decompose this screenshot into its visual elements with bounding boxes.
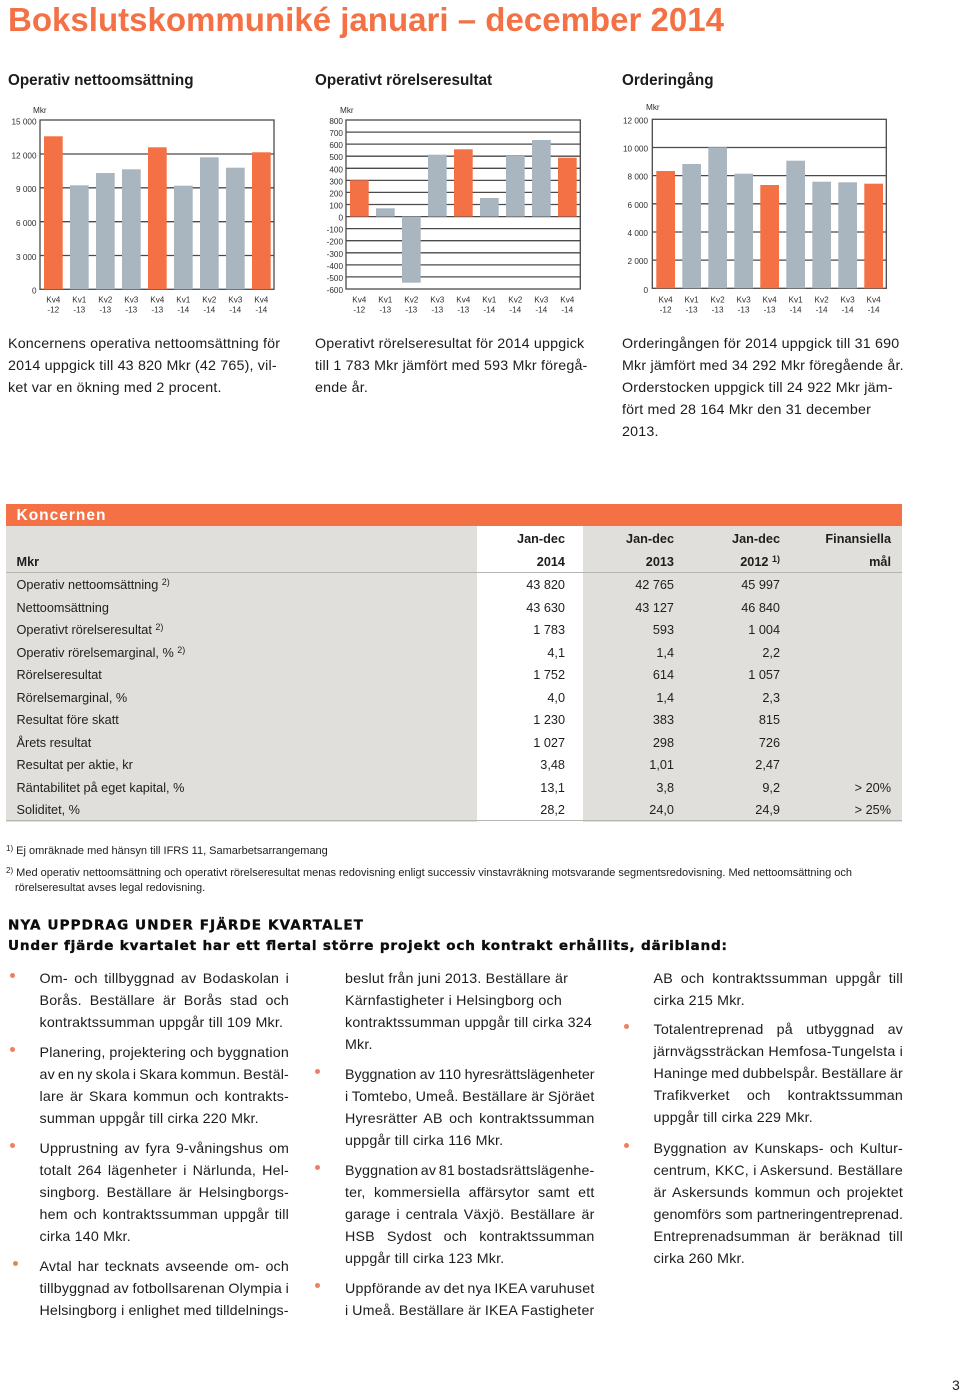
text block: nettoomsättning: Koncernens operativa nettoomsättning för [8,336,280,352]
footnote 2: 2) Med operativ nettoomsättning och operativt rörelseresultat menas redovisning enligt successiv vinstavräkning motsvarande segmentsredovisning. Med nettoomsättning och [6,866,852,879]
bullet item: Olympia: tillbyggnad av fotbollsarenan Olympia i [40,1281,289,1297]
row: operativ rörelsemarginal: 1,4 [656,646,674,660]
row: nettoomsättning: 43 630 [526,601,565,615]
row: räntabilitet: > 20% [855,781,891,795]
bar chart: operativ nettoomsättning: Kv1 [176,296,191,304]
row: resultat före skatt: 815 [759,713,780,727]
bullet item: Närlunda: Upprustning av fyra 9-våningshus om [40,1141,289,1157]
header row 2: 2012 1) [740,554,780,569]
bar chart: operativt rörelseresultat [327,106,581,314]
bar chart: operativ nettoomsättning: Kv4 [150,296,165,304]
bullet item: Växjö: Byggnation av 81 bostadsrättslägenhe- [345,1163,594,1179]
bar chart: operativ nettoomsättning: Kv3 [228,296,243,304]
bar chart: orderingång: 8 000 [628,173,648,182]
bar chart: operativt rörelseresultat: 100 [329,202,343,210]
bar chart: operativ nettoomsättning: -13 [151,306,164,314]
row: resultat före skatt: Resultat före skatt [16,713,119,727]
bar chart: operativt rörelseresultat: Kv2 [404,296,419,304]
row: resultat före skatt: 383 [653,713,674,727]
row: räntabilitet: 13,1 [540,781,565,795]
heading: Nya uppdrag: Under fjärde kvartalet har ett flertal större projekt och kontrakt erhållits, däribland: [8,937,727,954]
row: resultat per aktie [16,758,780,772]
row: soliditet: 28,2 [540,803,565,817]
bar chart: operativ nettoomsättning: Kv2 [98,296,113,304]
bullet item: Askersund: cirka 260 Mkr. [654,1251,745,1267]
text block: rörelseresultat: ende år. [315,380,368,396]
bar chart: operativt rörelseresultat: 700 [329,129,343,138]
bar chart: operativ nettoomsättning: Kv1 [72,296,87,304]
bullet item: Bodaskolan [10,971,289,1031]
bullet item: Växjö [315,1163,594,1267]
footnote 2 [6,866,852,894]
bar chart: operativt rörelseresultat: Kv1 [482,296,497,304]
row: soliditet: 24,0 [649,803,674,817]
bar chart: orderingång: Kv1 [789,296,803,304]
bar chart: operativt rörelseresultat: Kv4 [352,296,367,304]
bar chart: operativ nettoomsättning: -12 [47,306,60,314]
row: resultat per aktie: 2,47 [755,758,780,772]
bar chart: operativt rörelseresultat: Kv2 [508,296,523,304]
bar chart: orderingång: Kv4 [659,296,673,304]
row: operativt rörelseresultat [16,622,780,637]
row: operativ nettoomsättning: 42 765 [635,578,674,592]
footnote 2: rörelseresultat avses legal redovisning. [15,882,205,894]
bar chart: orderingång: 10 000 [623,144,648,154]
row: operativ nettoomsättning [16,577,780,592]
header row 1: Jan-dec [732,532,780,546]
text continuation: IKEA column top [345,971,592,1053]
bar chart: operativt rörelseresultat: -600 [327,286,343,295]
text block: orderingång: Orderingången för 2014 uppgick till 31 690 [622,336,899,352]
bar chart: orderingång: -14 [842,306,854,314]
row: operativ nettoomsättning: 45 997 [741,578,780,592]
row: räntabilitet [16,781,891,795]
bar chart: operativ nettoomsättning: -13 [73,306,86,314]
bar chart: operativ nettoomsättning: 12 000 [11,152,37,160]
row: operativ nettoomsättning: 43 820 [526,578,565,592]
bullet item: Olympia: Avtal har tecknats avseende om- och [40,1259,289,1275]
bar chart: operativt rörelseresultat: -200 [327,238,343,247]
bar chart: operativt rörelseresultat: -14 [483,306,496,314]
text block: orderingång: 2013. [622,424,659,440]
bar chart: operativt rörelseresultat: -500 [327,274,343,283]
row: räntabilitet: Räntabilitet på eget kapital, % [16,781,184,795]
row: nettoomsättning: 46 840 [741,601,780,615]
row: rörelseresultat: 614 [653,668,674,682]
bar chart: operativt rörelseresultat: -13 [405,306,418,314]
bar chart: operativt rörelseresultat: -13 [431,306,444,314]
row: årets resultat: 1 027 [533,736,565,750]
bullet item: Tombebo: Byggnation av 110 hyresrättslägenheter [345,1067,594,1083]
bar chart: operativ nettoomsättning: -13 [99,306,112,314]
row: operativt rörelseresultat: 1 004 [748,623,780,637]
bar chart: orderingång: 2 000 [628,257,648,266]
bar chart: operativ nettoomsättning: -14 [177,306,190,314]
bar chart: orderingång: -13 [764,306,776,314]
bullet item: Närlunda: cirka 140 Mkr. [40,1229,131,1245]
bar chart: operativt rörelseresultat: Kv1 [378,296,393,304]
header row 1: Finansiella [825,532,891,546]
bar chart: operativ nettoomsättning: Kv3 [124,296,139,304]
bar chart: operativt rörelseresultat: -13 [457,306,470,314]
row: operativt rörelseresultat: 1 783 [533,623,565,637]
bullet item: Tombebo [315,1067,594,1149]
bar chart: orderingång: Kv3 [841,296,855,304]
bar chart: operativ nettoomsättning: Kv2 [202,296,217,304]
bullet item: Bodaskolan: Om- och tillbyggnad av Bodaskolan i [40,971,289,987]
header row 2: 2014 [537,555,565,569]
bullet item: Skara: Planering, projektering och byggnation [40,1045,289,1061]
row: soliditet: > 25% [855,803,891,817]
bullet item: Tombebo: Hyresrätter AB och kontraktssumman [345,1111,594,1127]
bar chart: operativ nettoomsättning: Mkr [33,106,47,115]
row: rörelseresultat [16,668,780,682]
row: operativ rörelsemarginal: 2,2 [762,646,780,660]
bullet item: Askersund: är Askersunds kommun och projektet [654,1185,903,1201]
bar chart: operativ nettoomsättning: 15 000 [11,118,37,126]
bullet item: Närlunda: hem och kontraktssumman uppgår till [40,1207,289,1223]
table header bar [6,504,902,526]
row: räntabilitet: 9,2 [762,781,780,795]
bullet item: Hemfosa-Tungelsta [624,1022,903,1126]
text block: nettoomsättning: ket var en ökning med 2 procent. [8,380,222,396]
text block: nettoomsättning: 2014 uppgick till 43 820 Mkr (42 765), vil- [8,358,277,374]
heading: Nya uppdrag: NYA UPPDRAG UNDER FJÄRDE KVARTALET [8,916,364,934]
bullet item: Skara [10,1045,289,1127]
bar chart: operativ nettoomsättning: 0 [32,286,37,296]
table: Koncernen [6,504,902,822]
row: rörelsemarginal: 2,3 [762,691,780,705]
text block: rörelseresultat: Operativt rörelseresultat för 2014 uppgick [315,336,584,352]
bar chart: orderingång: Kv4 [867,296,881,304]
bar chart: orderingång: 6 000 [628,201,648,210]
bullet item: Hemfosa-Tungelsta: järnvägssträckan Hemfosa-Tungelsta i [654,1044,903,1060]
text continuation: column three top: AB och kontraktssumman uppgår till [654,971,903,987]
bullet item: Bodaskolan: kontraktssumman uppgår till 109 Mkr. [40,1015,283,1031]
bullet item: Närlunda: singborg. Beställare är Helsingborgs- [40,1185,289,1201]
row: årets resultat: Årets resultat [16,736,91,750]
row: rörelseresultat: Rörelseresultat [16,668,102,682]
text continuation: column three top [654,971,903,1009]
bullet item: Skara: summan uppgår till cirka 220 Mkr. [40,1111,259,1127]
bullet item: Närlunda: totalt 264 lägenheter i Närlunda, Hel- [40,1163,289,1179]
bullet item: IKEA: Uppförande av det nya IKEA varuhuset [345,1281,594,1297]
bar chart: operativ nettoomsättning [11,106,275,314]
row: operativ nettoomsättning: Operativ nettoomsättning 2) [16,577,170,592]
bullet item: Hemfosa-Tungelsta: Haninge med dubbelspår. Beställare är [654,1066,903,1082]
bar chart: orderingång: Mkr [646,103,660,112]
bar chart: operativt rörelseresultat: -14 [535,306,548,314]
bar chart: orderingång: Kv1 [685,296,699,304]
bar chart: operativt rörelseresultat: 300 [329,177,343,186]
header row 2: mål [869,555,891,569]
bar chart: operativ nettoomsättning: 6 000 [16,219,37,228]
row: soliditet: 24,9 [755,803,780,817]
heading: Orderingång: Orderingång [622,72,714,89]
heading: Operativ nettoomsättning: Operativ nettoomsättning [8,72,194,89]
row: rörelsemarginal [16,691,780,705]
bullet item: Växjö: HSB Sydost och kontraktssumman [345,1229,594,1245]
bar chart: orderingång: 12 000 [623,116,648,126]
row: soliditet [16,803,891,817]
row: operativ rörelsemarginal: 4,1 [547,646,565,660]
bar chart: operativ nettoomsättning: -14 [255,306,268,314]
table header bar: Koncernen [16,507,106,524]
bar chart: operativt rörelseresultat: -12 [353,306,366,314]
bar chart: operativt rörelseresultat: -14 [561,306,574,314]
bullet item: Bodaskolan: Borås. Beställare är Borås stad och [40,993,289,1009]
text continuation: IKEA column top: kontraktssumman uppgår till cirka 324 [345,1015,592,1031]
bullet item: Olympia [13,1259,289,1319]
bar chart: orderingång: 4 000 [628,229,648,238]
bar chart: orderingång: -13 [738,306,750,314]
heading: Operativt rörelseresultat: Operativt rörelseresultat [315,72,492,89]
highlighted column 2014 [477,526,583,822]
text block: orderingång: fört med 28 164 Mkr den 31 december [622,402,871,418]
bullet item: IKEA [315,1281,594,1319]
row: soliditet: Soliditet, % [16,803,80,817]
bullet item: Närlunda [10,1141,289,1245]
bullet item: Tombebo: i Tomtebo, Umeå. Beställare är Sjöräet [345,1089,594,1105]
bar chart: orderingång: -14 [816,306,828,314]
bar chart: operativt rörelseresultat: Mkr [340,106,354,115]
row: nettoomsättning: 43 127 [635,601,674,615]
row: årets resultat: 726 [759,736,780,750]
header row 1 [517,532,892,546]
bullet item: Hemfosa-Tungelsta: Trafikverket och kontraktssumman [654,1088,903,1104]
bar chart: operativt rörelseresultat: 800 [329,117,343,126]
bar chart: operativt rörelseresultat: Kv3 [430,296,445,304]
bar chart: orderingång: -12 [660,306,672,314]
row: resultat före skatt [16,713,780,727]
text continuation: IKEA column top: Kärnfastigheter i Helsingborg och [345,993,562,1009]
header row 2: 2013 [646,555,674,569]
row: operativt rörelseresultat: Operativt rörelseresultat 2) [16,622,163,637]
text continuation: column three top: cirka 215 Mkr. [654,993,745,1009]
text block: nettoomsättning [8,336,280,396]
row: operativ rörelsemarginal [16,645,780,660]
bullet item: Hemfosa-Tungelsta: uppgår till cirka 229 Mkr. [654,1110,813,1126]
header row 1: Jan-dec [626,532,674,546]
row: rörelsemarginal: 1,4 [656,691,674,705]
text block: orderingång: Orderstocken uppgick till 24 922 Mkr jäm- [622,380,893,396]
bar chart: operativ nettoomsättning: Kv4 [46,296,61,304]
bullet item: Skara: lare är Skara kommun och kontrakts- [40,1089,289,1105]
bar chart: orderingång: -13 [712,306,724,314]
bar chart: orderingång: Kv3 [737,296,751,304]
bar chart: operativt rörelseresultat: -13 [379,306,392,314]
bullet item: Tombebo: uppgår till cirka 116 Mkr. [345,1133,503,1149]
bar chart: operativ nettoomsättning: 9 000 [16,185,37,194]
row: rörelsemarginal: Rörelsemarginal, % [16,691,127,705]
bullet item: Växjö: uppgår till cirka 123 Mkr. [345,1251,504,1267]
bar chart: operativt rörelseresultat: 500 [329,153,343,162]
bar chart: orderingång: Kv2 [711,296,725,304]
row: rörelseresultat: 1 057 [748,668,780,682]
bar chart: operativ nettoomsättning: 3 000 [16,253,37,262]
header row 1: Jan-dec [517,532,565,546]
bullet item: Olympia: Helsingborg i enlighet med tilldelnings- [40,1303,289,1319]
bar chart: operativt rörelseresultat: Kv4 [560,296,575,304]
bar chart: orderingång: Kv4 [763,296,777,304]
bar chart: operativt rörelseresultat: 400 [329,165,343,174]
text continuation: IKEA column top: Mkr. [345,1037,373,1053]
row: operativt rörelseresultat: 593 [653,623,674,637]
bullet item: Skara: av en ny skola i Skara kommun. Bestäl- [40,1067,289,1083]
bullet item: Askersund [624,1141,903,1267]
bullet item: Växjö: ter, kommersiella affärsytor samt ett [345,1185,594,1201]
bar chart: operativt rörelseresultat: 200 [329,189,343,198]
page number: 3 [952,1377,960,1393]
bullet item: Askersund: Byggnation av Kunskaps- och Kultur- [654,1141,903,1157]
row: resultat per aktie: 1,01 [649,758,674,772]
bar chart: operativt rörelseresultat: -300 [327,250,343,259]
row: resultat före skatt: 1 230 [533,713,565,727]
bar chart: orderingång: -13 [686,306,698,314]
bullet item: Askersund: genomförs som partneringentreprenad. [654,1207,903,1223]
bullet item: Hemfosa-Tungelsta: Totalentreprenad på utbyggnad av [654,1022,903,1038]
bar chart: operativ nettoomsättning: -14 [229,306,242,314]
bar chart: operativt rörelseresultat: 0 [338,214,343,223]
text continuation: IKEA column top: beslut från juni 2013. Beställare är [345,971,568,987]
bar chart: operativt rörelseresultat: -400 [327,262,343,271]
bar chart: orderingång [623,103,887,314]
title: Bokslutskommuniké januari – december 2014 [8,2,724,39]
bar chart: orderingång: Kv2 [815,296,829,304]
bullet item: Askersund: Entreprenadsumman är beräknad till [654,1229,903,1245]
header row 2: Mkr [16,555,39,569]
row: resultat per aktie: 3,48 [540,758,565,772]
row: årets resultat [16,736,780,750]
heading: Nya uppdrag [8,916,727,954]
text block: rörelseresultat [315,336,588,396]
row: årets resultat: 298 [653,736,674,750]
bar chart: orderingång: 0 [643,286,648,295]
row: resultat per aktie: Resultat per aktie, kr [16,758,133,772]
bar chart: operativt rörelseresultat: -14 [509,306,522,314]
text block: orderingång: Mkr jämfört med 34 292 Mkr föregående år. [622,358,904,374]
row: operativ rörelsemarginal: Operativ rörelsemarginal, % 2) [16,645,185,660]
row: rörelsemarginal: 4,0 [547,691,565,705]
footnote 1: 1) Ej omräknade med hänsyn till IFRS 11, Samarbetsarrangemang [6,844,328,857]
bullet item: IKEA: i Umeå. Beställare är IKEA Fastigheter [345,1303,594,1319]
bar chart: operativ nettoomsättning: -13 [125,306,138,314]
bullet item: Askersund: centrum, KKC, i Askersund. Beställare [654,1163,903,1179]
bar chart: operativ nettoomsättning: Kv4 [254,296,269,304]
bar chart: operativt rörelseresultat: Kv3 [534,296,549,304]
bar chart: operativt rörelseresultat: Kv4 [456,296,471,304]
row: räntabilitet: 3,8 [656,781,674,795]
bullet item: Växjö: garage i centrala Växjö. Beställare är [345,1207,594,1223]
bar chart: orderingång: -14 [790,306,802,314]
text block: orderingång [622,336,904,440]
bar chart: operativt rörelseresultat: -100 [327,226,343,235]
row: rörelseresultat: 1 752 [533,668,565,682]
bar chart: operativ nettoomsättning: -14 [203,306,216,314]
row: nettoomsättning [16,601,780,615]
text block: rörelseresultat: till 1 783 Mkr jämfört med 593 Mkr föregå- [315,358,588,374]
bar chart: orderingång: -14 [868,306,880,314]
row: nettoomsättning: Nettoomsättning [16,601,109,615]
header row 2 [16,554,891,569]
bar chart: operativt rörelseresultat: 600 [329,141,343,150]
